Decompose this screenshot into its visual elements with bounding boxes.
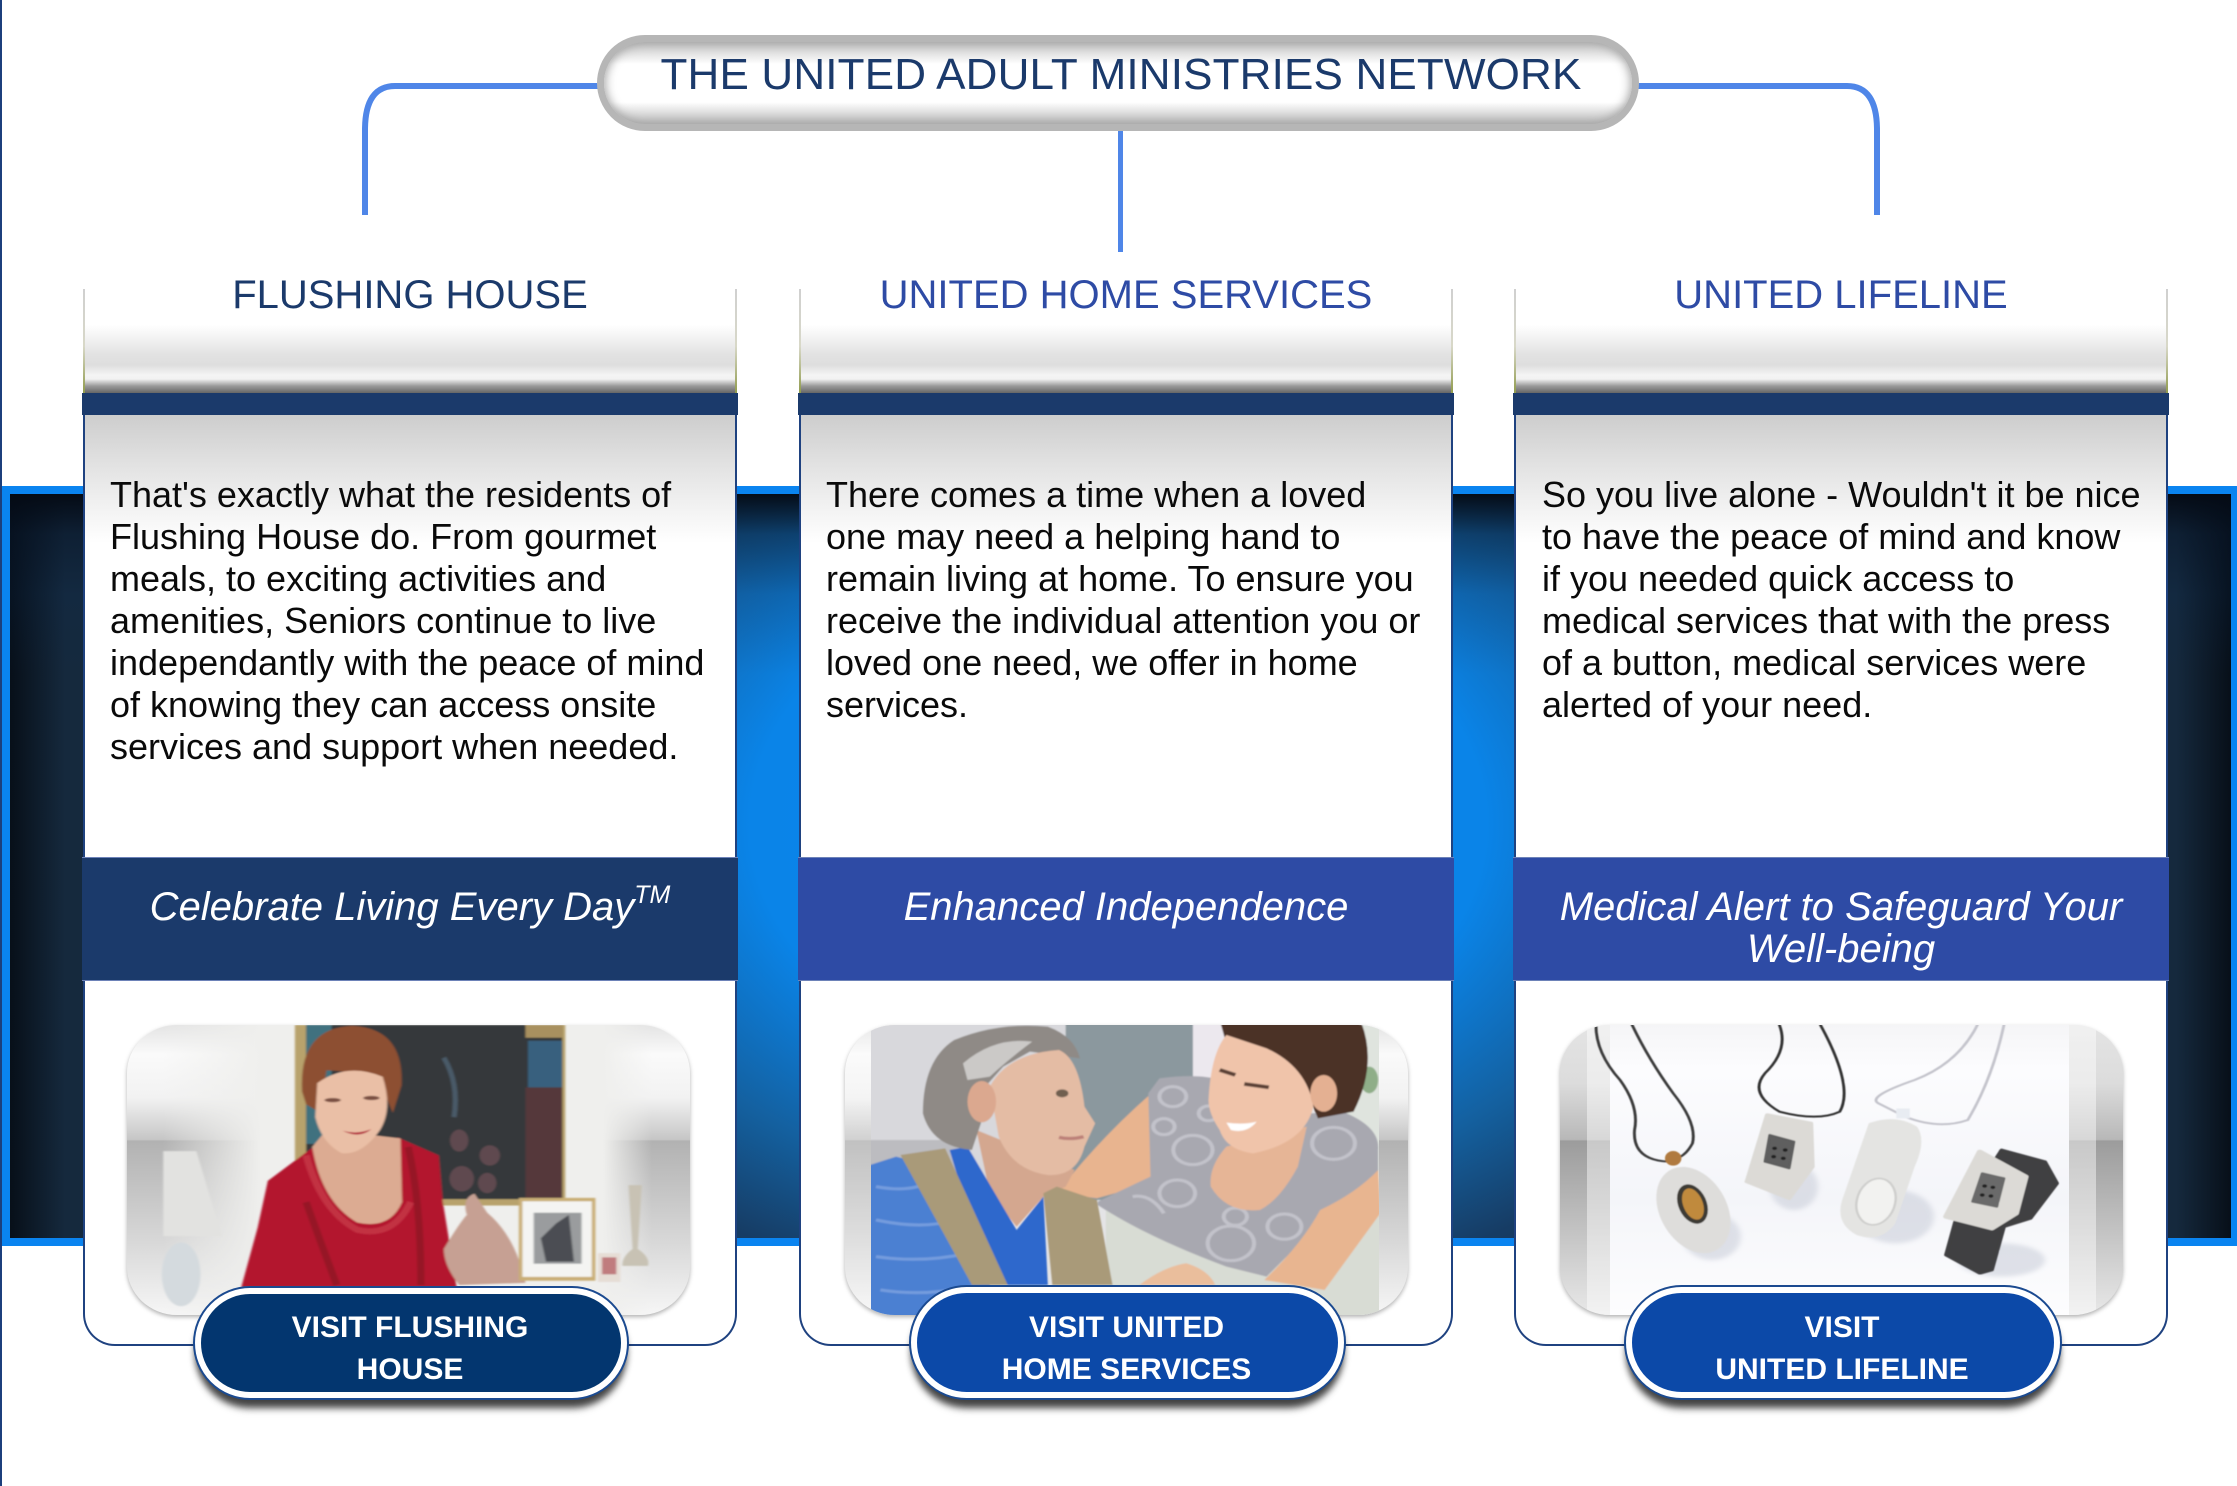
young woman chest bbox=[1211, 1127, 1307, 1210]
description text: alerted of your need. bbox=[1542, 684, 1872, 725]
title pill bbox=[597, 35, 1639, 131]
panel header bbox=[1514, 289, 2168, 393]
title text: THE UNITED ADULT MINISTRIES NETWORK bbox=[660, 50, 1582, 98]
card body bbox=[799, 415, 1453, 1346]
tagline banner: Enhanced Independence bbox=[904, 885, 1348, 929]
tagline banner bbox=[82, 857, 738, 981]
candlestick bbox=[622, 1185, 648, 1266]
description text: one may need a helping hand to bbox=[826, 516, 1340, 557]
description text: to have the peace of mind and know bbox=[1542, 516, 2120, 557]
senior face bbox=[990, 1050, 1095, 1175]
card body bbox=[1514, 415, 2168, 1346]
photo: senior woman in red bbox=[124, 1024, 692, 1320]
header bar bbox=[82, 393, 738, 415]
description text: So you live alone - Wouldn't it be nice bbox=[1542, 474, 2141, 515]
description text: There comes a time when a loved bbox=[826, 474, 1366, 515]
panel: united lifeline bbox=[1513, 272, 2169, 1414]
senior hair bbox=[923, 1026, 1080, 1150]
button: visit flushing house: HOUSE bbox=[357, 1353, 463, 1386]
young woman arm bbox=[1062, 1096, 1152, 1199]
description text: That's exactly what the residents of bbox=[110, 474, 671, 515]
button: visit united lifeline: UNITED LIFELINE bbox=[1715, 1353, 1969, 1386]
heading: united home services: UNITED HOME SERVICES bbox=[880, 272, 1372, 316]
pendant oval bbox=[1665, 1151, 1681, 1166]
description text bbox=[110, 474, 704, 767]
card body bbox=[83, 415, 737, 1346]
description text: if you needed quick access to bbox=[1542, 558, 2014, 599]
senior collar bbox=[950, 1147, 1048, 1285]
framed picture bbox=[519, 1198, 595, 1281]
button: visit flushing house: VISIT FLUSHING bbox=[292, 1311, 528, 1344]
button: visit united home services: VISIT UNITED bbox=[1029, 1311, 1224, 1344]
cords bbox=[1596, 1025, 2004, 1162]
wrist device bbox=[1946, 1150, 2057, 1273]
description text: of a button, medical services were bbox=[1542, 642, 2086, 683]
left edge rule bbox=[0, 0, 2, 1486]
description text: receive the individual attention you or bbox=[826, 600, 1420, 641]
lady head bbox=[302, 1026, 402, 1113]
button: visit united home services bbox=[911, 1287, 1344, 1398]
button: visit united lifeline bbox=[1626, 1287, 2060, 1398]
description text: of knowing they can access onsite bbox=[110, 684, 656, 725]
connector lines bbox=[362, 83, 1880, 252]
senior neck bbox=[976, 1130, 1075, 1227]
pendant capsule bbox=[1840, 1119, 1921, 1237]
button: visit united lifeline: VISIT bbox=[1804, 1311, 1880, 1344]
description text: remain living at home. To ensure you bbox=[826, 558, 1414, 599]
header bar bbox=[798, 393, 1454, 415]
heading: united lifeline: UNITED LIFELINE bbox=[1674, 272, 2008, 316]
tagline banner bbox=[798, 857, 1454, 981]
description text: amenities, Seniors continue to live bbox=[110, 600, 656, 641]
photo: caregiver with senior bbox=[842, 1024, 1410, 1320]
description text: Flushing House do. From gourmet bbox=[110, 516, 656, 557]
description text bbox=[826, 474, 1420, 725]
hand bbox=[1139, 1263, 1215, 1285]
senior shirt bbox=[865, 1157, 990, 1323]
shadows bbox=[1683, 1163, 2045, 1277]
blue background band bbox=[2, 486, 2237, 1246]
description text: services and support when needed. bbox=[110, 726, 678, 767]
button: visit flushing house bbox=[195, 1288, 627, 1398]
description text: loved one need, we offer in home bbox=[826, 642, 1358, 683]
panel: united home services bbox=[798, 272, 1454, 1414]
panel: flushing house bbox=[82, 272, 738, 1414]
photo: medical alert pendants bbox=[1558, 1024, 2126, 1320]
senior vest bbox=[901, 1148, 1008, 1285]
description text: services. bbox=[826, 684, 968, 725]
tagline banner: Celebrate Living Every DayTM bbox=[150, 881, 670, 929]
lady body bbox=[241, 1138, 457, 1287]
pendant square bbox=[1747, 1115, 1812, 1198]
heading: flushing house: FLUSHING HOUSE bbox=[232, 272, 588, 316]
button: visit united home services: HOME SERVICES bbox=[1002, 1353, 1251, 1386]
lamp bbox=[162, 1150, 209, 1236]
young woman hair bbox=[1220, 1020, 1368, 1118]
tagline banner bbox=[1513, 857, 2169, 981]
panel header bbox=[83, 289, 737, 393]
header bar bbox=[1513, 393, 2169, 415]
tagline banner: Medical Alert to Safeguard Your bbox=[1560, 885, 2122, 929]
description text: medical services that with the press bbox=[1542, 600, 2110, 641]
description text: independantly with the peace of mind bbox=[110, 642, 704, 683]
tagline banner: Well-being bbox=[1747, 927, 1935, 971]
painting bbox=[295, 1025, 565, 1206]
description text: meals, to exciting activities and bbox=[110, 558, 606, 599]
description text bbox=[1542, 474, 2141, 725]
young woman top bbox=[1098, 1076, 1378, 1277]
sculpture bbox=[444, 1194, 526, 1285]
panel header bbox=[799, 289, 1453, 393]
